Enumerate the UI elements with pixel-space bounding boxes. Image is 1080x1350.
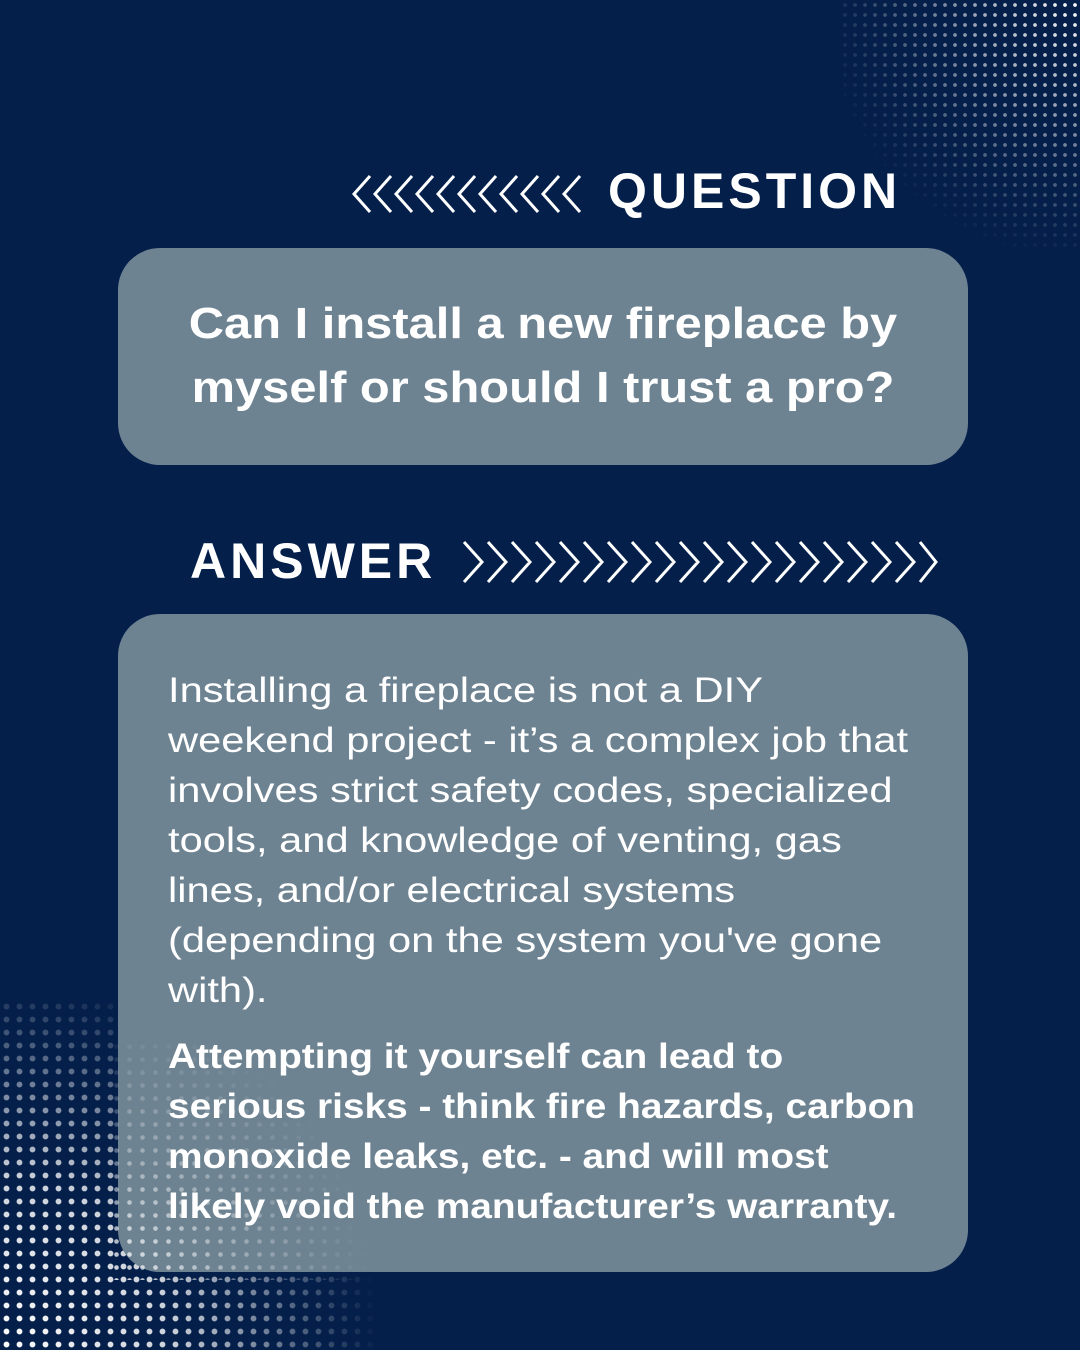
answer paragraph: Installing a fireplace is not a DIY [168,671,763,710]
bold warning paragraph [168,1037,915,1226]
answer paragraph [168,671,908,1010]
bold warning paragraph: Attempting it yourself can lead to [168,1037,783,1076]
icon: right chevrons [463,541,938,583]
answer heading [190,533,938,589]
answer paragraph: lines, and/or electrical systems [168,871,735,910]
halftone overlay on panel corner [110,1040,370,1280]
answer paragraph: involves strict safety codes, specialized [168,771,893,810]
label: ANSWER: ANSWER [190,533,436,589]
halftone bottom-left [0,1000,400,1350]
answer paragraph: with). [168,971,268,1010]
label: QUESTION: QUESTION [608,163,901,219]
question text [189,299,897,412]
panel: question [118,248,968,465]
answer paragraph: (depending on the system you've gone [168,921,882,960]
bold warning paragraph: serious risks - think fire hazards, carbon [168,1087,915,1126]
bold warning paragraph: monoxide leaks, etc. - and will most [168,1137,829,1176]
answer paragraph: weekend project - it’s a complex job that [168,721,908,760]
panel: answer [118,614,968,1272]
question heading [352,163,901,219]
answer paragraph: tools, and knowledge of venting, gas [168,821,842,860]
halftone top-right [840,0,1080,250]
question text: Can I install a new fireplace by [189,299,897,348]
bold warning paragraph: likely void the manufacturer’s warranty. [168,1187,897,1226]
icon: left chevrons [352,175,581,213]
question text: myself or should I trust a pro? [192,363,894,412]
